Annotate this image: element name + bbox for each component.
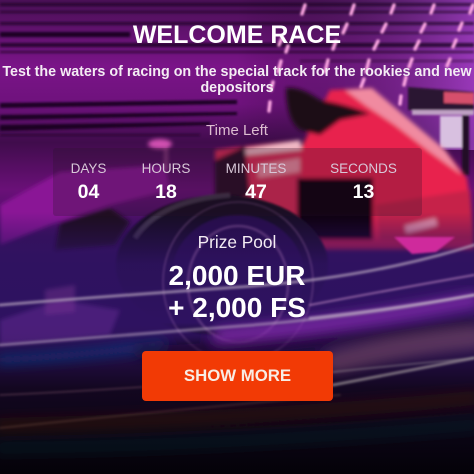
minutes: MINUTES: [226, 161, 286, 176]
subtitle: Test the waters of racing on the special track for the rookies and new: [2, 64, 472, 80]
show more button: SHOW MORE: [184, 366, 291, 385]
prize amount: [168, 260, 306, 323]
front wing and tread: [0, 139, 172, 250]
seconds: SECONDS: [330, 161, 397, 176]
days: 04: [78, 181, 99, 203]
minutes: 47: [245, 181, 267, 203]
hours: 18: [155, 181, 177, 203]
prize amount: + 2,000 FS: [168, 292, 306, 323]
light trails: [0, 245, 474, 448]
show more button: [142, 351, 333, 401]
countdown panel: [53, 148, 422, 216]
lower fade: [0, 212, 474, 342]
days: DAYS: [71, 161, 106, 176]
magenta car nose: [394, 237, 455, 254]
hours: [142, 161, 190, 203]
days: [71, 161, 106, 203]
subtitle: [2, 64, 472, 96]
front tyre: [116, 195, 328, 335]
time left label: Time Left: [206, 122, 268, 139]
faint wheel rings: [163, 202, 313, 362]
seconds: [330, 161, 397, 203]
subtitle: depositors: [200, 80, 274, 96]
car body: [215, 88, 474, 250]
title: WELCOME RACE: [133, 21, 341, 49]
neon streak lights: [269, 5, 473, 111]
hours: HOURS: [142, 161, 190, 176]
prize amount: 2,000 EUR: [169, 260, 305, 291]
minutes: [226, 161, 286, 203]
rear wing: [408, 87, 474, 175]
left ghost shapes: [0, 285, 120, 345]
prize pool label: Prize Pool: [198, 232, 276, 252]
seconds: 13: [353, 181, 374, 203]
